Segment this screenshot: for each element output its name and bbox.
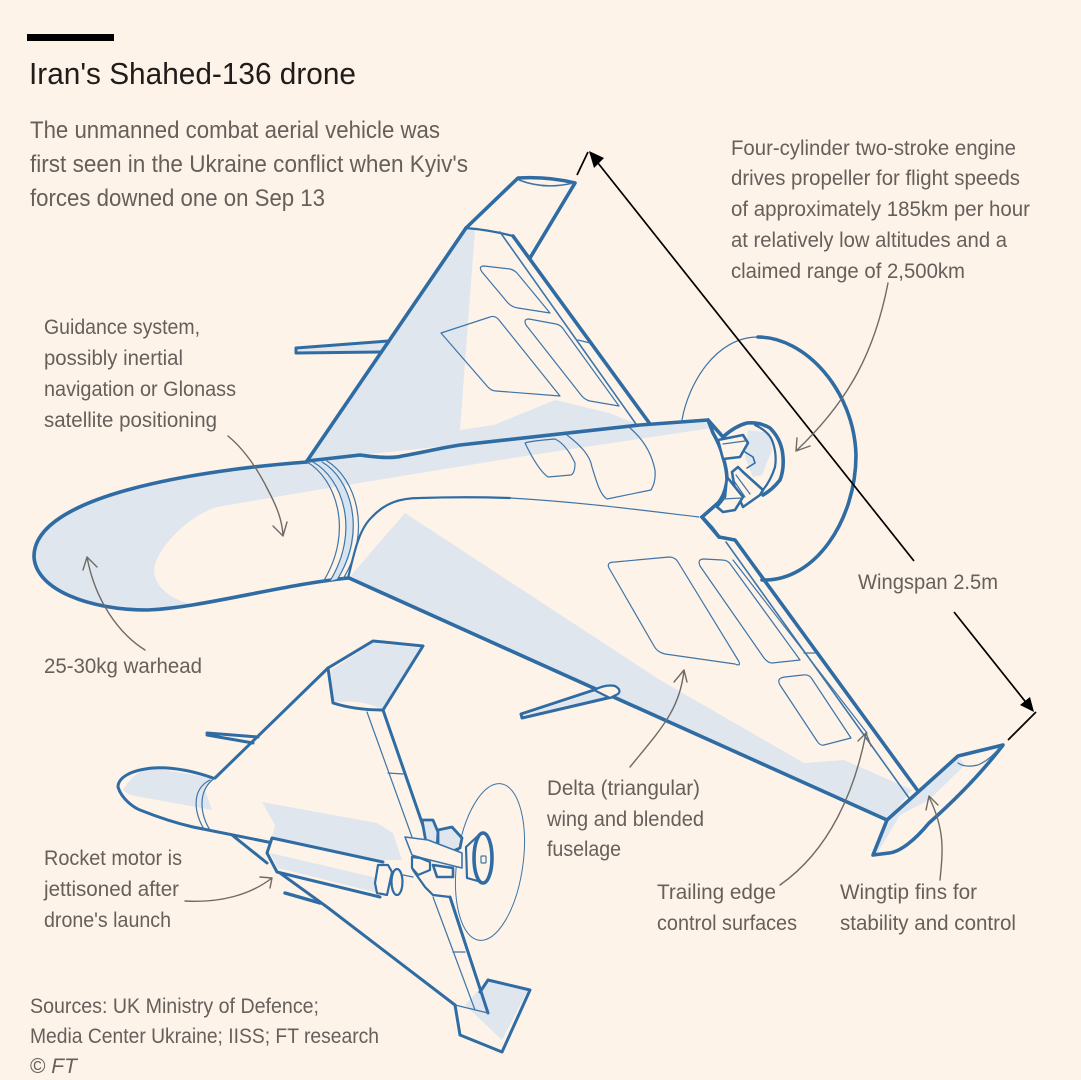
arrow: rocket motor bbox=[185, 877, 272, 901]
nose bbox=[34, 462, 348, 610]
callout: rocket motor: jettisoned after bbox=[43, 878, 179, 901]
small drone nose and rings bbox=[118, 768, 273, 843]
upper small fin bbox=[296, 341, 388, 353]
small upper fin tip bbox=[328, 641, 423, 710]
propeller disc bbox=[682, 337, 856, 580]
lower hex bbox=[433, 865, 453, 877]
small lower fin tip bbox=[455, 980, 530, 1052]
label: wingspan: Wingspan 2.5m bbox=[858, 571, 998, 594]
rear cylinder bbox=[422, 820, 438, 850]
arrow: warhead bbox=[83, 557, 145, 650]
small drone shading bbox=[123, 643, 528, 1040]
callout: engine: claimed range of 2,500km bbox=[731, 260, 965, 283]
callout: delta wing: Delta (triangular) bbox=[547, 777, 700, 800]
small fins bbox=[207, 733, 320, 903]
callout: rocket motor: drone's launch bbox=[44, 909, 171, 932]
fuselage panels bbox=[525, 428, 655, 499]
callout: engine: of approximately 185km per hour bbox=[731, 198, 1030, 221]
small drone rear spar lower bbox=[433, 897, 488, 1013]
wing root curve bbox=[348, 497, 699, 578]
arrowhead: top bbox=[589, 151, 604, 168]
callout: wingtip fins: Wingtip fins for bbox=[840, 881, 977, 904]
fuselage outline bbox=[307, 420, 723, 461]
callout: engine: Four-cylinder two-stroke engine bbox=[731, 137, 1016, 160]
shading: lower wing bbox=[349, 513, 912, 820]
engine and hub bbox=[702, 420, 783, 537]
callout: engine bbox=[731, 137, 1030, 283]
wingspan dimension arrow bbox=[577, 151, 1036, 740]
callout: guidance system: navigation or Glonass bbox=[44, 378, 236, 401]
subtitle text block: The unmanned combat aerial vehicle was bbox=[30, 117, 440, 144]
title: Iran's Shahed-136 drone bbox=[29, 56, 356, 91]
sources bbox=[30, 995, 379, 1078]
lower wing panels bbox=[608, 557, 867, 745]
callout: guidance system: possibly inertial bbox=[44, 347, 183, 370]
sources: Sources: UK Ministry of Defence; bbox=[30, 995, 319, 1018]
callout: delta wing: wing and blended bbox=[546, 808, 704, 831]
lower small fin bbox=[521, 686, 619, 718]
manifold bars bbox=[405, 837, 462, 868]
arrow: engine bbox=[796, 283, 888, 451]
fuselage end ring bbox=[702, 420, 727, 517]
sources: © FT bbox=[30, 1055, 79, 1078]
small launch drone illustration bbox=[118, 641, 534, 1052]
lower left hex bbox=[412, 857, 430, 875]
rocket motor bbox=[267, 838, 413, 897]
shading: upper wing bbox=[307, 228, 640, 461]
callout: engine: drives propeller for flight speeds bbox=[731, 167, 1020, 190]
large hex cylinder bbox=[438, 827, 462, 853]
callout: delta wing: fuselage bbox=[547, 838, 621, 861]
callout: wingtip fins bbox=[840, 881, 1016, 935]
arrow: guidance system bbox=[228, 436, 287, 536]
upper wingtip fin bbox=[466, 178, 575, 258]
hub outer ring bbox=[723, 423, 783, 495]
sources: Media Center Ukraine; IISS; FT research bbox=[30, 1025, 379, 1048]
small drone rear spar upper bbox=[367, 710, 428, 840]
callout: wingtip fins: stability and control bbox=[840, 912, 1016, 935]
arrow: delta wing bbox=[630, 670, 687, 767]
callout: guidance system: satellite positioning bbox=[44, 409, 217, 432]
small drone leading edge bbox=[215, 668, 328, 778]
callout: guidance system bbox=[44, 316, 236, 432]
small drone lower edge bbox=[232, 835, 455, 1005]
arrowhead: bottom bbox=[1020, 697, 1034, 712]
lower wingtip fin bbox=[873, 745, 1003, 855]
upper wing outline bbox=[307, 228, 650, 461]
shading: fuselage and nose bbox=[34, 419, 712, 610]
subtitle text block: forces downed one on Sep 13 bbox=[30, 185, 325, 212]
small drone body fill bbox=[118, 670, 488, 1013]
callout: engine: at relatively low altitudes and a bbox=[731, 229, 1007, 252]
callout: rocket motor: Rocket motor is bbox=[44, 847, 182, 870]
middle cylinder bbox=[745, 452, 755, 468]
lower cylinder left bbox=[717, 477, 743, 512]
fuselage and wing fill bbox=[34, 228, 918, 820]
upper wing panels bbox=[441, 266, 619, 406]
hub body bbox=[466, 834, 485, 883]
arrow: trailing edge bbox=[780, 733, 871, 885]
small engine and hub bbox=[405, 820, 492, 897]
lower cylinder right bbox=[732, 467, 763, 507]
callout: warhead: 25-30kg warhead bbox=[44, 655, 202, 678]
callout: rocket motor bbox=[43, 847, 182, 932]
fuselage rings bbox=[307, 461, 359, 582]
lower wing outline bbox=[349, 517, 918, 820]
small propeller disc bbox=[446, 779, 534, 945]
callout: trailing edge: Trailing edge bbox=[657, 881, 776, 904]
subtitle text block bbox=[30, 117, 468, 212]
callout: trailing edge: control surfaces bbox=[657, 912, 797, 935]
upper cylinder bbox=[718, 435, 748, 459]
callout: delta wing bbox=[546, 777, 704, 861]
subtitle text block: first seen in the Ukraine conflict when Kyiv's bbox=[30, 151, 468, 178]
hub shading bbox=[745, 430, 772, 477]
callout: trailing edge bbox=[657, 881, 797, 935]
header bar bbox=[27, 34, 114, 41]
callout: guidance system: Guidance system, bbox=[44, 316, 200, 339]
main drone illustration bbox=[34, 178, 1003, 855]
arrow: wingtip fins bbox=[926, 796, 942, 880]
